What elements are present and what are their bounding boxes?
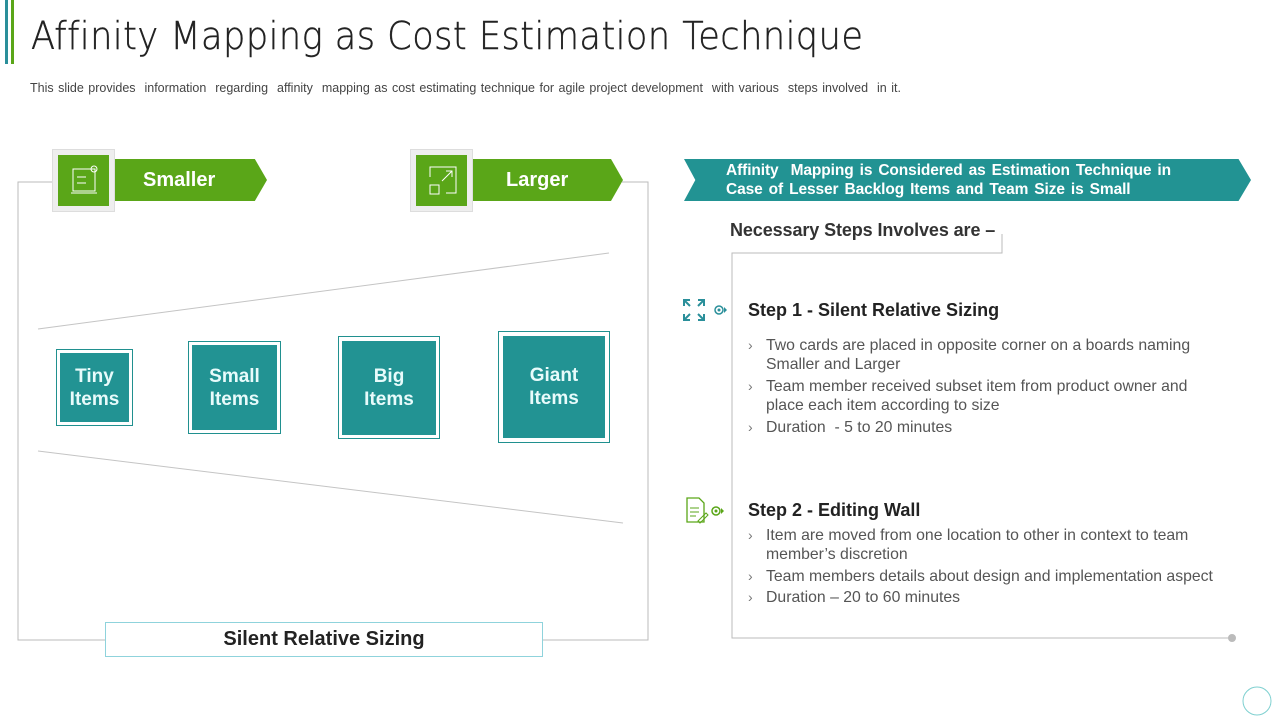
- icon: expand: [683, 299, 727, 321]
- step 1 bullets: Two cards are placed in opposite corner on a boards naming: [766, 337, 1190, 354]
- item: giant: [498, 331, 610, 443]
- item: big: Items: [364, 389, 414, 410]
- label: Smaller: [115, 159, 267, 201]
- item: giant: Items: [529, 388, 579, 409]
- heading: necessary steps: Necessary Steps Involves are –: [730, 220, 995, 240]
- step 2: [686, 497, 920, 524]
- label: Larger: [473, 159, 623, 201]
- icon: laptop: [52, 149, 115, 212]
- step 2 bullets: [766, 526, 1188, 564]
- step 2 title: Step 2 - Editing Wall: [748, 500, 920, 520]
- item: small: Items: [210, 388, 259, 410]
- subtitle: This slide provides information regarding affinity mapping as cost estimating technique for agile project development with various steps involved in it.: [30, 81, 901, 95]
- label: Smaller: Smaller: [143, 169, 215, 191]
- larger card: [410, 149, 623, 212]
- banner: Affinity Mapping is Considered as Estimation Technique in: [726, 162, 1171, 179]
- item: tiny: Tiny: [75, 366, 114, 386]
- item: tiny: Items: [70, 388, 119, 410]
- item: giant: Giant: [530, 365, 578, 386]
- icon: document edit: [686, 497, 724, 524]
- caption: silent relative sizing: Silent Relative Sizing: [223, 628, 425, 650]
- step 2 bullets: member’s discretion: [766, 546, 908, 563]
- accent bars: [5, 0, 8, 64]
- item: small: [188, 341, 281, 434]
- banner: Case of Lesser Backlog Items and Team Size is Small: [726, 181, 1131, 198]
- banner: [684, 159, 1251, 201]
- step 2 bullets: Item are moved from one location to other in context to team: [766, 527, 1188, 544]
- smaller card: [52, 149, 267, 212]
- item: big: [338, 336, 440, 439]
- title: Affinity Mapping as Cost Estimation Technique: [31, 14, 863, 58]
- text: Team member received subset item from product owner and: [766, 378, 1187, 395]
- item: big: Big: [374, 366, 404, 387]
- item: small: Small: [209, 366, 260, 386]
- text: Duration – 20 to 60 minutes: [766, 589, 960, 606]
- step 1 bullets: Smaller and Larger: [766, 356, 900, 373]
- item: tiny: [56, 349, 133, 426]
- text: place each item according to size: [766, 397, 1000, 414]
- text: Team members details about design and implementation aspect: [766, 568, 1213, 585]
- step 1: [683, 299, 999, 321]
- step 1 bullets: [766, 336, 1190, 374]
- label: Larger: Larger: [506, 169, 568, 191]
- caption: silent relative sizing: [105, 622, 543, 657]
- step 1 title: Step 1 - Silent Relative Sizing: [748, 300, 999, 320]
- icon: resize: [410, 149, 473, 212]
- text: Duration - 5 to 20 minutes: [766, 419, 952, 436]
